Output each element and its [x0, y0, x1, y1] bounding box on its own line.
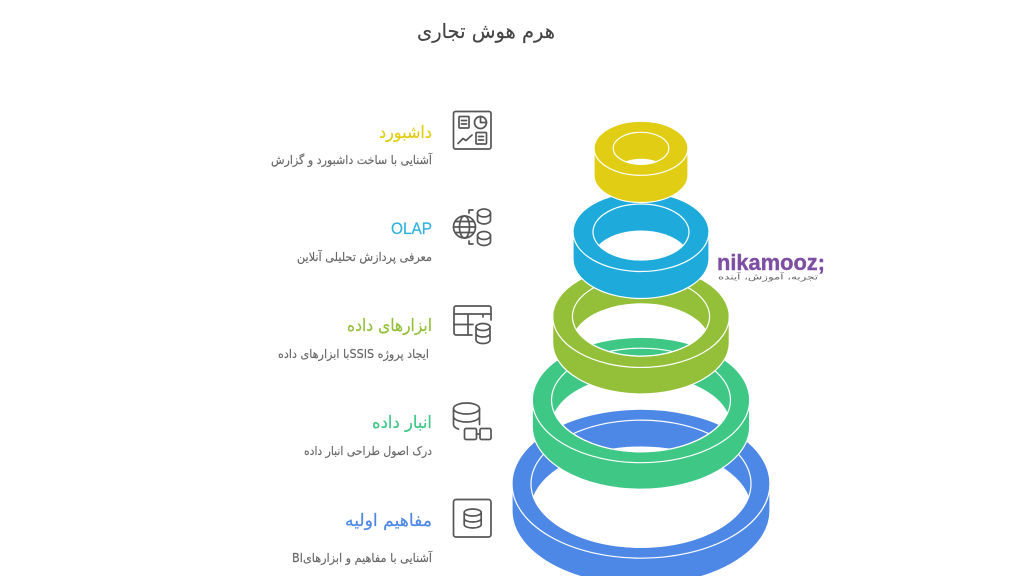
- heading: OLAP: OLAP: [391, 219, 432, 238]
- title: هرم هوش تجاری: [417, 19, 555, 43]
- ring: ابزارهای داده (olive): [553, 266, 729, 394]
- icon: OLAP globe and databases: [454, 209, 490, 246]
- icon: dashboard: [454, 112, 491, 149]
- text: مفاهیم اولیه description: آشنایی با مفاهیم و ابزارهایBI: [292, 550, 433, 566]
- ring: داشبورد (yellow): [594, 121, 688, 202]
- ring: OLAP (sky blue): [573, 192, 709, 298]
- icon: table and database: [454, 306, 491, 344]
- logo: nikamooz: nikamooz;: [717, 250, 825, 275]
- text: ابزارهای داده description: ایجاد پروژه SSISبا ابزارهای داده: [278, 347, 429, 362]
- icon: database and linked boxes: [454, 403, 491, 440]
- text: OLAP description: معرفی پردازش تحلیلی آنلاین: [297, 249, 432, 265]
- text: داشبورد description: آشنایی با ساخت داشبورد و گزارش: [271, 152, 433, 168]
- text: انبار داده description: درک اصول طراحی انبار داده: [304, 444, 432, 459]
- heading: ابزارهای داده: ابزارهای داده: [347, 316, 432, 336]
- ring: مفاهیم اولیه (blue): [512, 409, 770, 576]
- heading: داشبورد: داشبورد: [379, 123, 432, 143]
- icon: database in box: [454, 500, 491, 537]
- ring: انبار داده (green): [532, 337, 750, 489]
- logo: nikamooz: تجربه، آموزش، آینده: [718, 272, 818, 282]
- heading: انبار داده: انبار داده: [372, 413, 432, 433]
- heading: مفاهیم اولیه: مفاهیم اولیه: [345, 511, 432, 531]
